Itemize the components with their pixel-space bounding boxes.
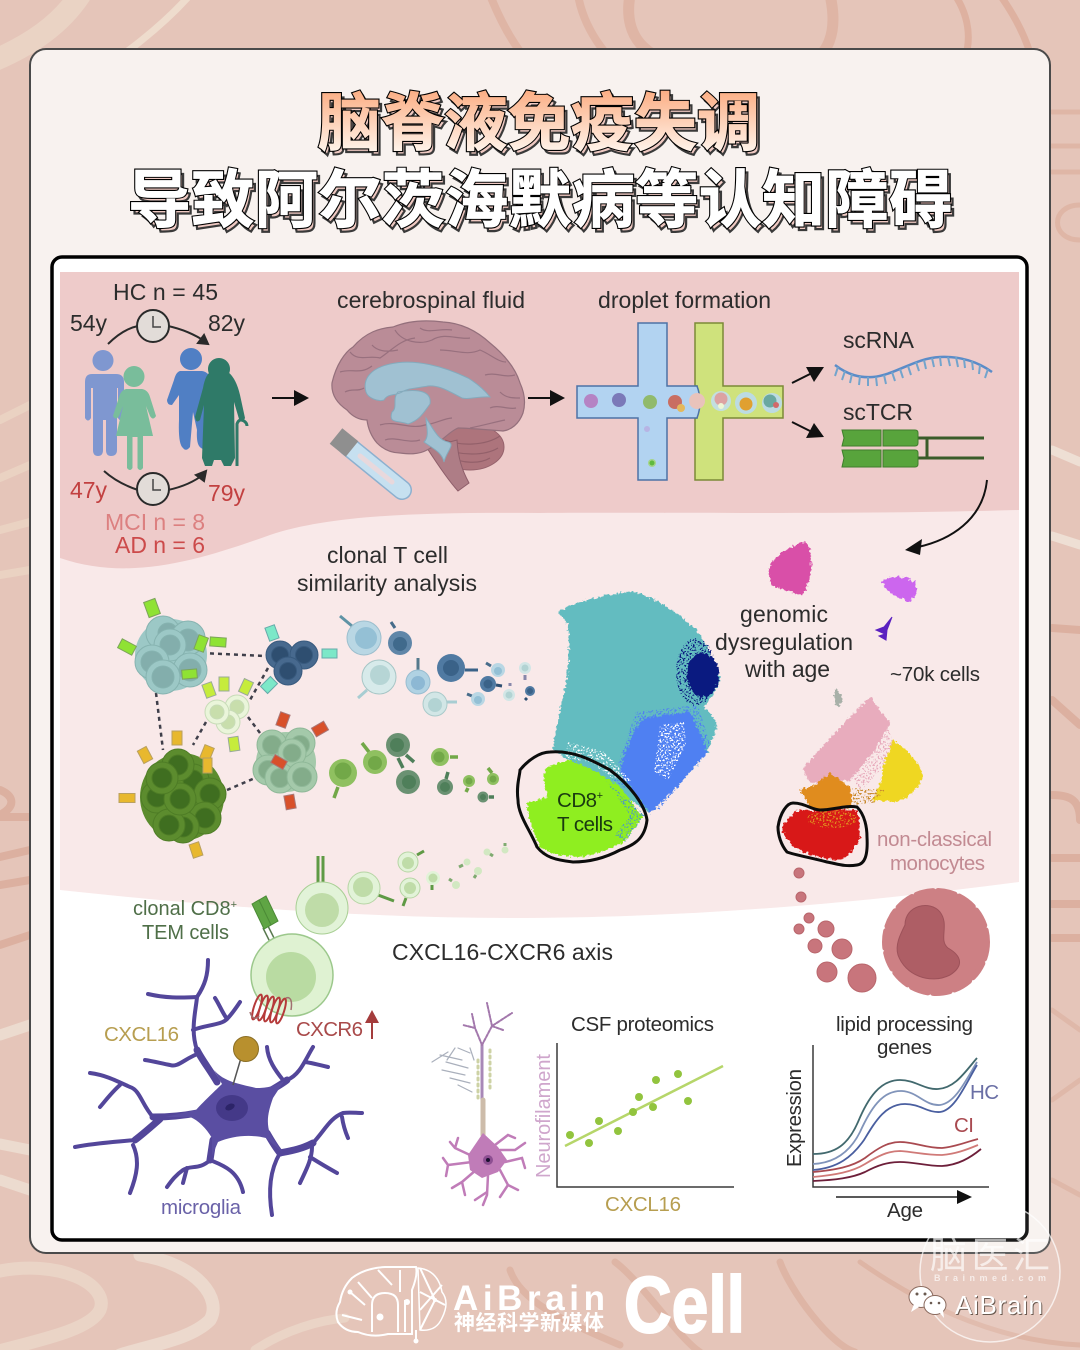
droplets — [584, 394, 598, 408]
label: CXCR6 up — [296, 1010, 379, 1041]
text: 54y: 54y — [70, 310, 108, 336]
light pink band — [60, 500, 1019, 918]
logo: Cell: Cell — [624, 1260, 745, 1349]
icon: man — [85, 350, 124, 456]
icon: wechat — [909, 1286, 946, 1318]
red top speckle — [807, 810, 857, 828]
text: 82y: 82y — [208, 310, 246, 336]
blue speckle — [612, 705, 710, 810]
pink cluster — [803, 697, 890, 783]
icon: CXCR6 receptor — [250, 994, 291, 1024]
blue-green fringe — [605, 780, 645, 842]
ventricle — [365, 362, 490, 462]
axes — [557, 1043, 734, 1187]
heading: clonal T cell similarity analysis — [297, 542, 477, 596]
label: clonal CD8+ TEM cells: clonal CD8 — [133, 898, 231, 920]
label: CD8+ T cells: CD8 — [557, 789, 597, 812]
label: Age: Age — [887, 1199, 923, 1222]
title: 导致阿尔茨海默病等认知障碍 — [128, 166, 952, 236]
label: clonal CD8+ TEM cells — [133, 898, 237, 944]
label: CD8+ T cells — [557, 789, 613, 836]
cluster outline — [517, 752, 647, 862]
orange speckle — [852, 788, 885, 805]
subtitle: 神经科学新媒体 — [454, 1307, 604, 1337]
white speckle — [565, 722, 686, 782]
text: 47y: 47y — [70, 477, 108, 503]
label: CD8+ T cells: + — [597, 790, 603, 802]
top rose band — [60, 272, 1019, 568]
label: CXCR6 up: CXCR6 — [296, 1018, 363, 1041]
logo: AiBrain — [336, 1267, 605, 1344]
green CD8 cluster — [527, 760, 643, 857]
vial — [336, 436, 402, 490]
fit line — [565, 1066, 723, 1146]
y axis label: Expression — [783, 1069, 806, 1167]
watermark: Brainmed.com — [934, 1273, 1046, 1283]
label: non-classical monocytes: non-classical — [877, 828, 992, 851]
label: clonal CD8+ TEM cells: TEM cells — [142, 922, 229, 944]
heading: clonal T cell similarity analysis: clonal T cell — [327, 542, 448, 568]
heading: droplet formation: droplet formation — [598, 287, 771, 313]
dark blue cluster — [266, 641, 318, 685]
cerebrum — [332, 321, 525, 454]
arrow: top clock arc — [108, 326, 208, 344]
UMAP: small clusters — [769, 541, 917, 708]
icon: neuron — [432, 1003, 525, 1205]
label: scTCR: scTCR — [843, 399, 913, 425]
pale interior — [850, 728, 893, 790]
violet cluster — [881, 577, 917, 601]
icon: TCR receptor — [842, 430, 984, 467]
icon: RNA strand — [835, 357, 992, 386]
label: CI: CI — [954, 1114, 974, 1137]
icon: bottom clock — [137, 473, 169, 505]
text: HC n: HC n = 45 — [113, 279, 218, 305]
watermark: 脑医汇 — [930, 1225, 1050, 1279]
icon: elderly woman — [195, 358, 245, 466]
indigo cluster — [876, 617, 892, 640]
dark green receptors — [119, 731, 214, 858]
teal cluster — [135, 616, 207, 694]
chart title: lipid processing — [836, 1013, 973, 1036]
arrow: to scTCR — [792, 422, 824, 438]
cerebellum — [436, 424, 504, 470]
chart title: CSF proteomics — [571, 1013, 714, 1036]
text: genomic dysregulation: dysregulation — [715, 629, 853, 655]
brainstem — [427, 440, 469, 491]
teal cluster receptors — [118, 598, 226, 679]
pale cluster — [205, 695, 249, 734]
figure panel — [52, 257, 1027, 1240]
text: 70k cells: ~70k cells — [890, 663, 980, 686]
red cluster — [782, 809, 860, 860]
cohort panel — [70, 279, 247, 558]
chart: CSF proteomics scatter — [533, 1013, 734, 1216]
cluster outline — [778, 803, 867, 866]
icon: microglia — [75, 960, 362, 1215]
teal cluster — [553, 592, 720, 813]
arrow: bottom clock arc — [104, 471, 206, 490]
title: 脑脊液免疫失调 — [318, 89, 760, 159]
navy speckle — [676, 638, 716, 706]
icon: top clock — [137, 310, 169, 342]
chart: lipid processing genes — [783, 1013, 999, 1222]
label: microglia: microglia — [161, 1196, 242, 1219]
HC curves — [813, 1058, 981, 1181]
illustration: microfluidic chip — [577, 323, 783, 480]
arrow: to scRNA — [792, 367, 824, 383]
title: 脑脊液免疫失调 — [318, 89, 760, 159]
icon: woman — [113, 366, 156, 470]
watermark text: AiBrain: AiBrain — [955, 1290, 1043, 1320]
watermark — [920, 1202, 1060, 1342]
watermark text: AiBrain: AiBrain — [956, 1291, 1044, 1321]
arrow: curved to UMAP — [905, 480, 987, 555]
heading: clonal T cell similarity analysis: similarity analysis — [297, 570, 477, 596]
expanding green cells — [329, 733, 499, 802]
chart title: genes — [877, 1036, 932, 1059]
green channel — [695, 323, 783, 480]
text: MCI n: MCI n = 8 — [105, 509, 205, 535]
arrow: cohort to brain — [272, 390, 309, 406]
arrow: age — [836, 1190, 972, 1204]
label: clonal CD8+ TEM cells: + — [231, 899, 237, 911]
chart title — [836, 1013, 973, 1059]
small monocytes — [794, 868, 876, 992]
title: 导致阿尔茨海默病等认知障碍 — [128, 166, 952, 236]
text: AD n: AD n = 6 — [115, 532, 205, 558]
text: genomic dysregulation — [715, 601, 853, 682]
x axis label: CXCL16 — [605, 1193, 681, 1216]
icon: cane — [237, 420, 247, 466]
network of clonal clusters — [118, 598, 337, 858]
blue channel — [577, 323, 700, 480]
label: CXCL16: CXCL16 — [104, 1023, 179, 1046]
yellow cluster — [873, 740, 923, 802]
sage cluster — [253, 728, 317, 793]
expanding pale CD8 cells — [296, 843, 508, 934]
heading: CXCL16-CXCR6 axis: CXCL16-CXCR6 axis — [392, 939, 613, 965]
grey cluster — [834, 688, 843, 708]
text: genomic dysregulation: genomic — [740, 601, 828, 627]
magenta cluster — [769, 541, 811, 596]
expanding blue-teal cells — [340, 616, 535, 716]
text: genomic dysregulation: with age — [744, 656, 830, 682]
heading: cerebrospinal fluid: cerebrospinal fluid — [337, 287, 525, 313]
icon: elderly man — [167, 348, 214, 450]
blue cluster — [620, 712, 707, 813]
dark green cluster — [140, 749, 226, 843]
text: 79y: 79y — [208, 480, 246, 506]
label: non-classical monocytes: monocytes — [890, 852, 985, 875]
wordmark: AiBrain — [453, 1279, 605, 1318]
title — [128, 89, 955, 240]
dotted connections — [156, 653, 268, 790]
title: 脑脊液免疫失调 — [321, 93, 763, 163]
y axis label: Neurofilament — [533, 1054, 555, 1178]
icon: brain circuit — [336, 1267, 446, 1342]
UMAP: myeloid — [778, 697, 923, 866]
pale receptors — [202, 677, 253, 752]
sage receptors — [271, 712, 329, 810]
illustration: brain — [332, 321, 525, 491]
arrow: brain to droplet — [528, 390, 565, 406]
label: non-classical monocytes — [877, 828, 992, 875]
label: CD8+ T cells: T cells — [557, 813, 613, 836]
icon: monocyte — [885, 891, 987, 993]
orange cluster — [800, 773, 853, 812]
label: HC: HC — [970, 1081, 999, 1104]
title: 导致阿尔茨海默病等认知障碍 — [131, 170, 955, 240]
label: scRNA: scRNA — [843, 327, 915, 353]
axes — [813, 1045, 989, 1187]
dark blue receptors — [261, 625, 337, 693]
icon: T cell — [251, 896, 333, 1016]
points — [566, 1070, 692, 1147]
sulci — [340, 328, 520, 441]
UMAP: T cells — [517, 592, 720, 862]
navy cluster — [687, 653, 719, 697]
